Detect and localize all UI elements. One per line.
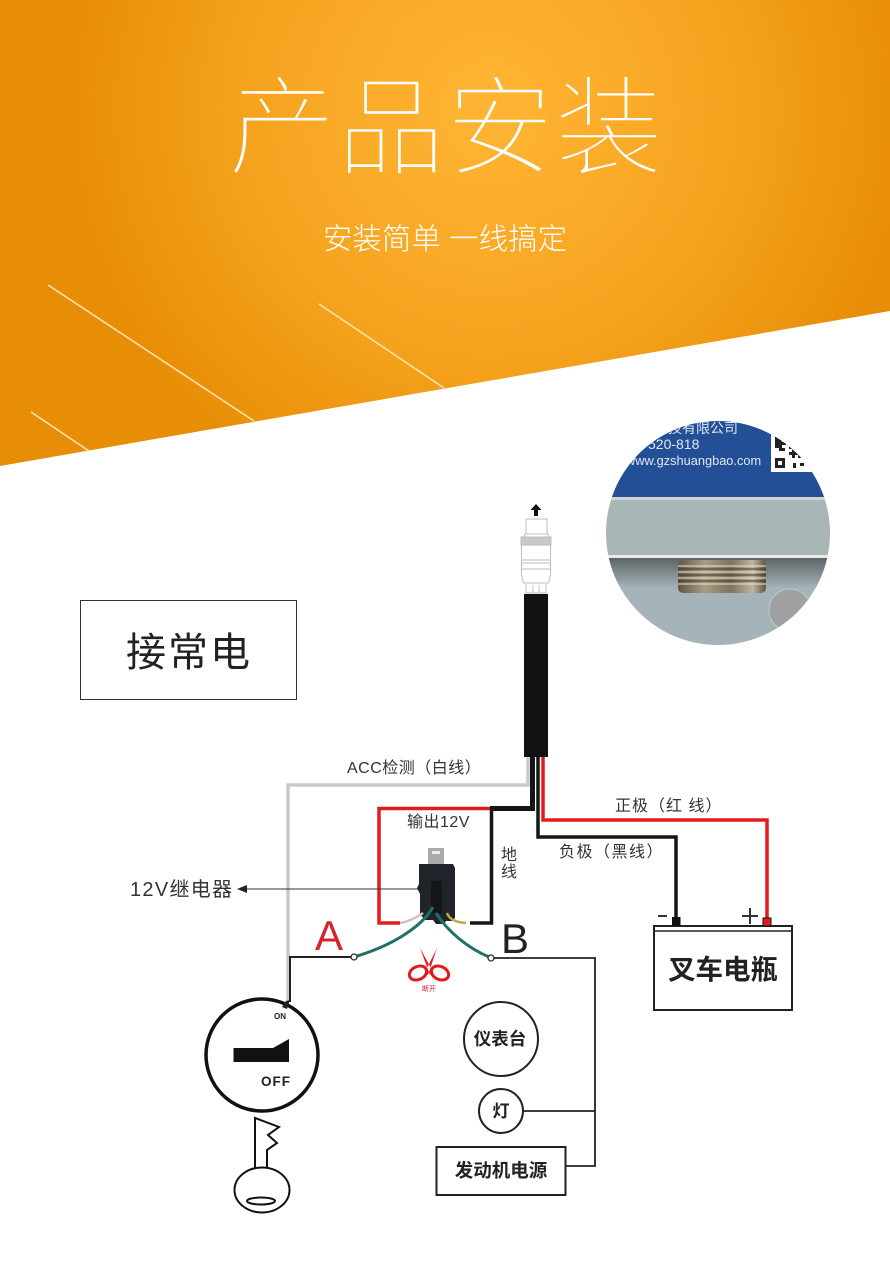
label: 12V relay with arrow: 12V继电器 (130, 878, 233, 901)
battery: 叉车电瓶 (668, 954, 778, 985)
circular product photo: 520-818 (648, 436, 700, 452)
label: positive: 正极（红 线） (615, 797, 722, 815)
icon: red scissors cut (407, 948, 451, 993)
ignition switch: ON (274, 1012, 286, 1021)
terminals A and B (351, 954, 494, 961)
green wires to A and B (354, 907, 489, 957)
label B: B (501, 915, 529, 962)
label: ground: 地 (501, 846, 517, 864)
circle: 灯 (479, 1089, 523, 1133)
wire: ACC white (288, 757, 528, 1002)
box: 发动机电源 (436, 1147, 566, 1195)
label: ground (501, 846, 517, 881)
label: 12V relay with arrow (130, 878, 418, 901)
box: 发动机电源: 发动机电源 (455, 1160, 548, 1181)
wire: negative black (538, 757, 676, 918)
wiring harness sleeve (524, 594, 548, 757)
circle: 仪表台 (464, 1002, 538, 1076)
label box: 接常电: 接常电 (126, 631, 252, 675)
subtitle: 安装简单 一线搞定 (323, 223, 567, 256)
circular product photo: www.gzshuangbao.com (625, 453, 761, 468)
circular product photo (606, 421, 830, 645)
icon: red scissors cut: 断开 (422, 984, 436, 993)
battery (654, 908, 792, 1010)
label A: A (315, 912, 343, 959)
QR code (771, 434, 812, 472)
icon: up arrow (530, 504, 542, 516)
wire: ground black (470, 809, 492, 923)
label: negative: 负极（黑线） (559, 843, 664, 861)
wire: output red (379, 808, 492, 923)
ignition switch (206, 999, 318, 1111)
orange header banner (0, 0, 890, 466)
label: ACC: ACC检测（白线） (347, 759, 481, 777)
icon: key (234, 1118, 290, 1212)
wire: ground thick (490, 757, 532, 808)
connector plug (521, 519, 551, 593)
relay (400, 848, 466, 924)
label: ground: 线 (501, 863, 517, 881)
wire A to switch (290, 957, 354, 1002)
ignition switch: OFF (261, 1074, 291, 1089)
circle: 仪表台: 仪表台 (474, 1029, 526, 1049)
label: output 12V: 输出12V (407, 813, 470, 831)
label box: 接常电 (80, 600, 296, 700)
threaded connector (678, 560, 766, 593)
circular product photo: 科技有限公司 (654, 420, 738, 436)
wire: positive red (543, 757, 767, 918)
wire B to loads (491, 958, 595, 1166)
circle: 灯: 灯 (492, 1102, 510, 1121)
title: 产品安装 (228, 68, 664, 189)
